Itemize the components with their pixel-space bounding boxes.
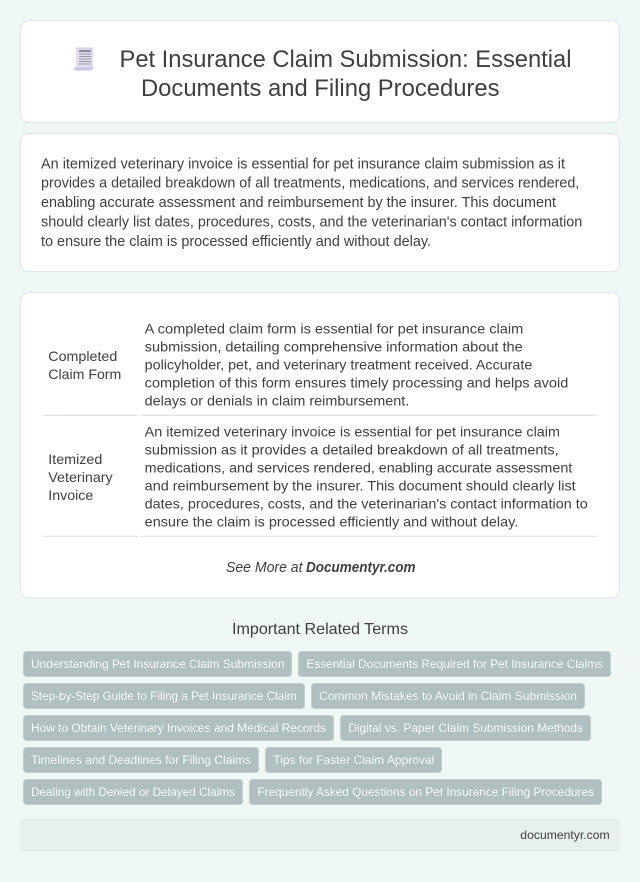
row description: completed claim form: policyholder, pet, and veterinary treatment received. Accurate [145,357,533,373]
chip [24,684,304,708]
text block: intro paragraph: enabling accurate assessment and reimbursement by the insurer. This document [41,195,556,211]
row description: completed claim form: completion of this form ensures timely processing and helps avoid [145,375,568,391]
related terms chips [24,652,610,804]
row description: itemized veterinary invoice: An itemized veterinary invoice is essential for pet insurance claim [145,424,560,440]
heading: important related terms: Important Related Terms [232,621,408,638]
chip [250,780,602,804]
panel: intro paragraph [20,134,620,272]
chip: Timelines and Deadlines for Filing Claims [31,753,251,767]
row description: itemized veterinary invoice [145,424,588,530]
table row: itemized veterinary invoice [48,424,588,530]
see more link: See More at [226,560,303,576]
chip: Tips for Faster Claim Approval [273,753,434,767]
panel: documents table [20,292,620,598]
see more link [226,560,416,576]
panel: header [20,20,620,122]
chip: Dealing with Denied or Delayed Claims [31,785,235,799]
row description: itemized veterinary invoice: ensure the claim is processed efficiently and without delay. [145,514,518,530]
row description: itemized veterinary invoice: medications, and services rendered, enabling accurate assessment [145,460,572,476]
chip [312,684,584,708]
footer bar: documentyr.com [520,828,610,842]
row description: completed claim form [145,321,568,409]
footer bar [20,818,620,852]
chip [266,748,442,772]
chip: Common Mistakes to Avoid in Claim Submission [319,689,577,703]
row label: completed claim form: Completed [48,348,117,364]
row description: completed claim form: submission, detailing comprehensive information about the [145,339,523,355]
row description: itemized veterinary invoice: submission as it provides a detailed breakdown of all treatments, [145,442,559,458]
chip [298,652,610,676]
row description: itemized veterinary invoice: and reimbursement by the insurer. This document should clearly list [145,478,576,494]
title: Pet Insurance Claim Submission: Essential [120,46,572,73]
table row: completed claim form [48,321,568,409]
chip [24,652,292,676]
row label: itemized veterinary invoice: Itemized [48,451,102,467]
chip: Essential Documents Required for Pet Insurance Claims [306,657,603,671]
row label: itemized veterinary invoice: Veterinary [48,469,113,485]
text block: intro paragraph: to ensure the claim is processed efficiently and without delay. [41,234,431,250]
see more link: Documentyr.com [306,560,416,576]
row label: itemized veterinary invoice [48,451,113,503]
row label: completed claim form: Claim Form [48,366,121,382]
text block: intro paragraph: provides a detailed breakdown of all treatments, medications, and services rendered, [41,176,579,192]
text block: intro paragraph [41,156,582,250]
title: Documents and Filing Procedures [141,75,500,102]
chip [24,780,242,804]
row label: completed claim form [48,348,121,382]
row description: completed claim form: delays or denials in claim reimbursement. [145,393,409,409]
icon: receipt document [74,48,93,70]
row description: completed claim form: A completed claim form is essential for pet insurance claim [145,321,523,337]
text block: intro paragraph: An itemized veterinary invoice is essential for pet insurance claim submission as it [41,156,565,172]
row label: itemized veterinary invoice: Invoice [48,487,94,503]
chip: Frequently Asked Questions on Pet Insurance Filing Procedures [257,785,594,799]
row description: itemized veterinary invoice: dates, procedures, costs, and the veterinarian's contact information to [145,496,588,512]
chip: Step-by-Step Guide to Filing a Pet Insurance Claim [31,689,296,703]
chip: Understanding Pet Insurance Claim Submission [31,657,284,671]
chip: How to Obtain Veterinary Invoices and Medical Records [31,721,326,735]
text block: intro paragraph: should clearly list dates, procedures, costs, and the veterinarian's contact information [41,214,582,230]
chip [24,748,258,772]
chip [24,716,334,740]
chip [340,716,590,740]
chip: Digital vs. Paper Claim Submission Methods [348,721,583,735]
title [120,46,572,102]
